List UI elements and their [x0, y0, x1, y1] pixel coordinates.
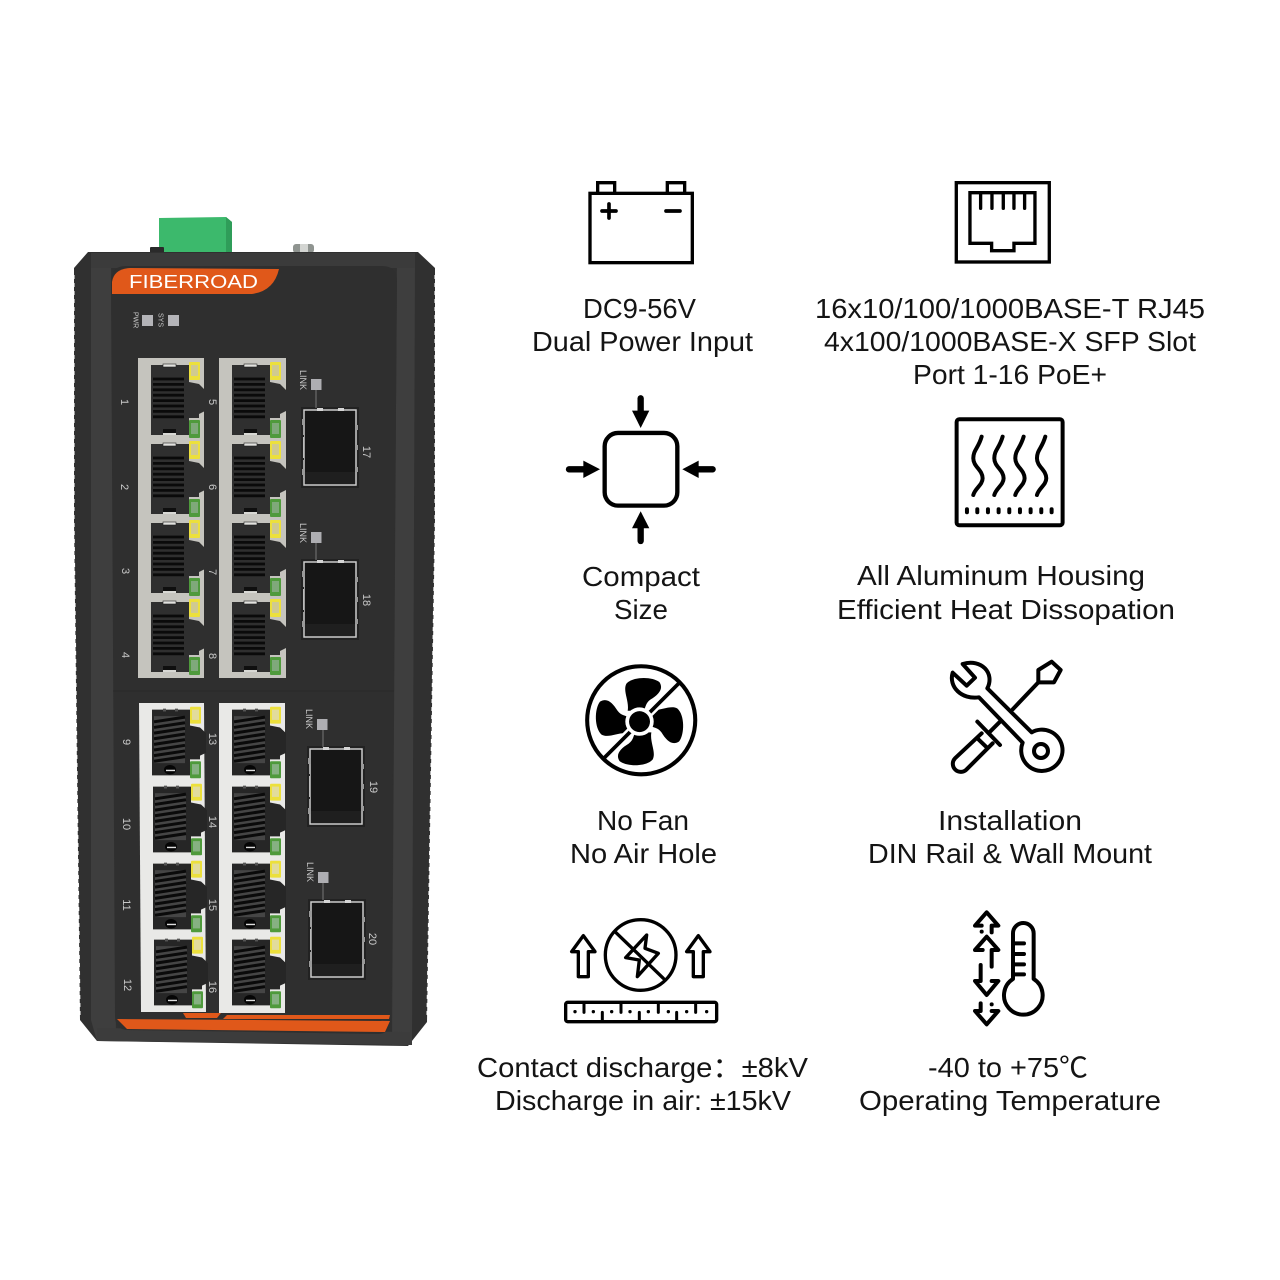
label: 4x100/1000BASE-X SFP Slot [824, 326, 1196, 357]
port numbers: 13 [206, 733, 218, 745]
port numbers: 4 [119, 652, 131, 658]
feature: operating temperature [859, 912, 1161, 1116]
RJ45 port block 1-4 [138, 358, 205, 678]
icon: thermometer with arrows [975, 912, 1043, 1024]
port numbers: 5 [206, 399, 218, 405]
icon: square with inward arrows [569, 398, 713, 541]
SFP slots 17-20 [301, 407, 366, 980]
port numbers: 10 [120, 818, 132, 830]
label [815, 293, 1205, 390]
link LEDs: LINK [304, 709, 314, 729]
RJ45 port block 5-8 [219, 358, 286, 678]
logo text: FIBERROAD [129, 272, 258, 292]
icon: crossed-out fan [587, 666, 695, 774]
label [532, 293, 753, 357]
icon: heat dissipation [957, 419, 1063, 525]
top switch tab [150, 247, 164, 253]
label [837, 560, 1175, 625]
label: DC9-56V [583, 293, 696, 324]
panel seam [113, 690, 394, 692]
port numbers: 7 [206, 569, 218, 575]
status LEDs PWR and SYS: PWR [132, 312, 138, 328]
link LEDs [298, 370, 328, 900]
product photo: FIBERROAD industrial switch [74, 217, 435, 1046]
label [570, 805, 717, 869]
link LEDs: LINK [305, 862, 315, 882]
label [582, 561, 700, 625]
green power terminal connector [159, 217, 232, 253]
grounding screw [293, 244, 314, 253]
label: Compact [582, 561, 700, 592]
port numbers: 3 [119, 568, 131, 574]
feature: no fan [570, 666, 717, 869]
feature: compact size [569, 398, 713, 625]
port numbers: 18 [360, 594, 372, 606]
feature: installation [868, 662, 1152, 869]
chassis [74, 252, 435, 1046]
label: -40 to +75℃ [928, 1052, 1088, 1083]
label [868, 805, 1152, 869]
feature: dual power input [532, 183, 753, 357]
orange logo plate [112, 268, 279, 294]
port numbers: 16 [206, 981, 218, 993]
label [859, 1052, 1161, 1116]
label: All Aluminum Housing [857, 560, 1145, 591]
link LEDs: LINK [298, 370, 308, 390]
label: Installation [938, 805, 1082, 836]
status LEDs PWR and SYS [132, 312, 179, 328]
icon: wrench and screwdriver [952, 662, 1063, 772]
orange bottom stripes [117, 1013, 390, 1032]
port numbers: 11 [120, 899, 132, 911]
feature: aluminum housing [837, 419, 1175, 625]
port numbers [118, 399, 379, 993]
feature: ESD protection [477, 920, 808, 1116]
RJ45 port block 9-12 [139, 703, 208, 1012]
label: Dual Power Input [532, 326, 753, 357]
RJ45 port block 13-16 [219, 703, 286, 1013]
label: Contact discharge：±8kV [477, 1052, 808, 1083]
port numbers: 2 [118, 484, 130, 490]
port numbers: 8 [206, 653, 218, 659]
port numbers: 12 [121, 979, 133, 991]
front panel [111, 266, 397, 1034]
label: Port 1-16 PoE+ [913, 359, 1107, 390]
port numbers: 17 [360, 446, 372, 458]
label: DIN Rail & Wall Mount [868, 838, 1152, 869]
port numbers: 6 [206, 484, 218, 490]
label: No Air Hole [570, 838, 717, 869]
label: Size [614, 594, 668, 625]
label: Operating Temperature [859, 1085, 1161, 1116]
feature: ports [815, 183, 1205, 390]
label: No Fan [597, 805, 689, 836]
port numbers: 9 [120, 739, 132, 745]
label [477, 1052, 808, 1116]
port numbers: 14 [206, 816, 218, 828]
label: Efficient Heat Dissopation [837, 594, 1175, 625]
label: Discharge in air: ±15kV [495, 1085, 791, 1116]
port numbers: 20 [366, 933, 378, 945]
icon: RJ45 socket [956, 183, 1049, 262]
label: 16x10/100/1000BASE-T RJ45 [815, 293, 1205, 324]
link LEDs: LINK [298, 523, 308, 543]
icon: battery [590, 183, 692, 263]
icon: static discharge [566, 920, 717, 1022]
port numbers: 1 [118, 399, 130, 405]
status LEDs PWR and SYS: SYS [156, 313, 164, 327]
port numbers: 15 [206, 899, 218, 911]
port numbers: 19 [367, 781, 379, 793]
